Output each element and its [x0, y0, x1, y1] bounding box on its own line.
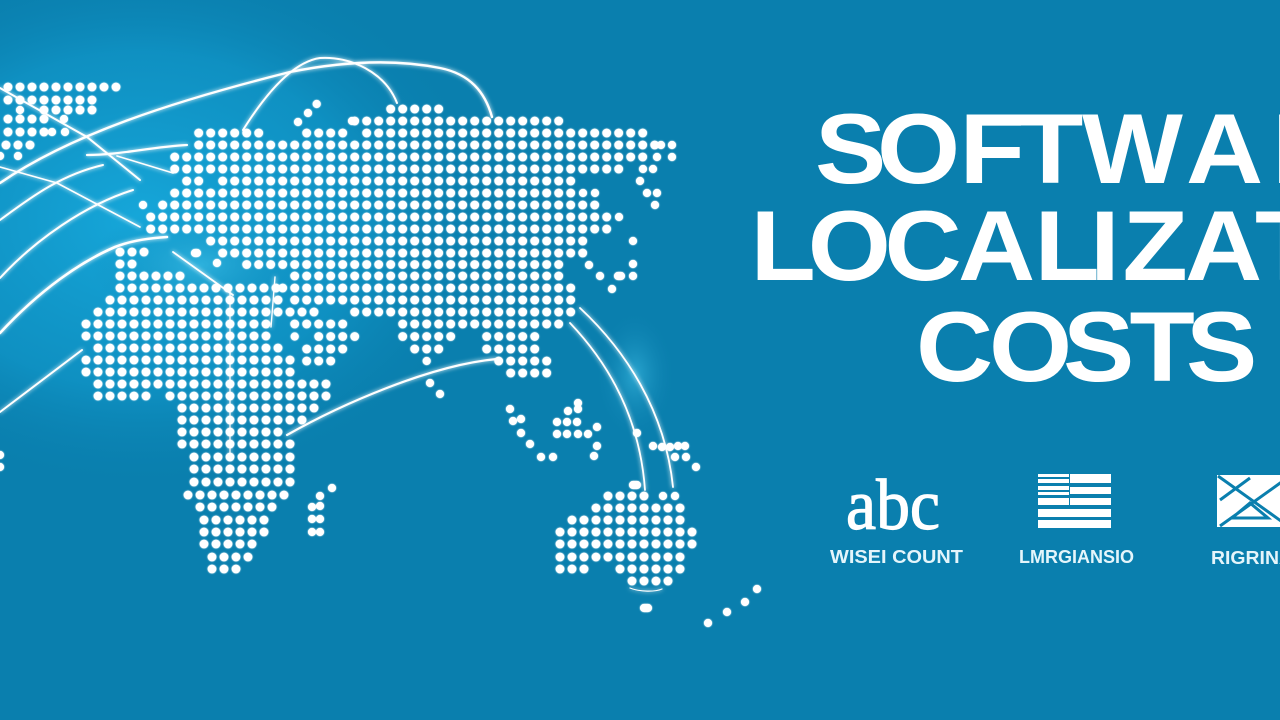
map: Eurasia dots: [151, 109, 655, 373]
title: [750, 94, 1280, 402]
map: Australia dots: [560, 496, 692, 581]
feature: languages: [1019, 474, 1134, 567]
label: word count: WISEI COUNT: [830, 547, 963, 567]
map: Africa dots: [86, 252, 326, 569]
icon: crossed envelope: [1217, 475, 1280, 527]
connection arcs: [0, 58, 673, 591]
dotted world map: [0, 87, 757, 623]
title: COSTS: [916, 292, 1257, 402]
map: North America fragment dots: [6, 87, 116, 145]
map: Eurasia outlying dots: [143, 104, 672, 394]
icon: striped flag: [1038, 474, 1111, 528]
icon: abc letters: abc: [846, 465, 940, 545]
feature: regions: [1211, 475, 1280, 568]
label: languages: LMRGIANSIO: [1019, 547, 1134, 567]
feature: word count: [830, 465, 963, 567]
map: islands: [312, 121, 757, 623]
